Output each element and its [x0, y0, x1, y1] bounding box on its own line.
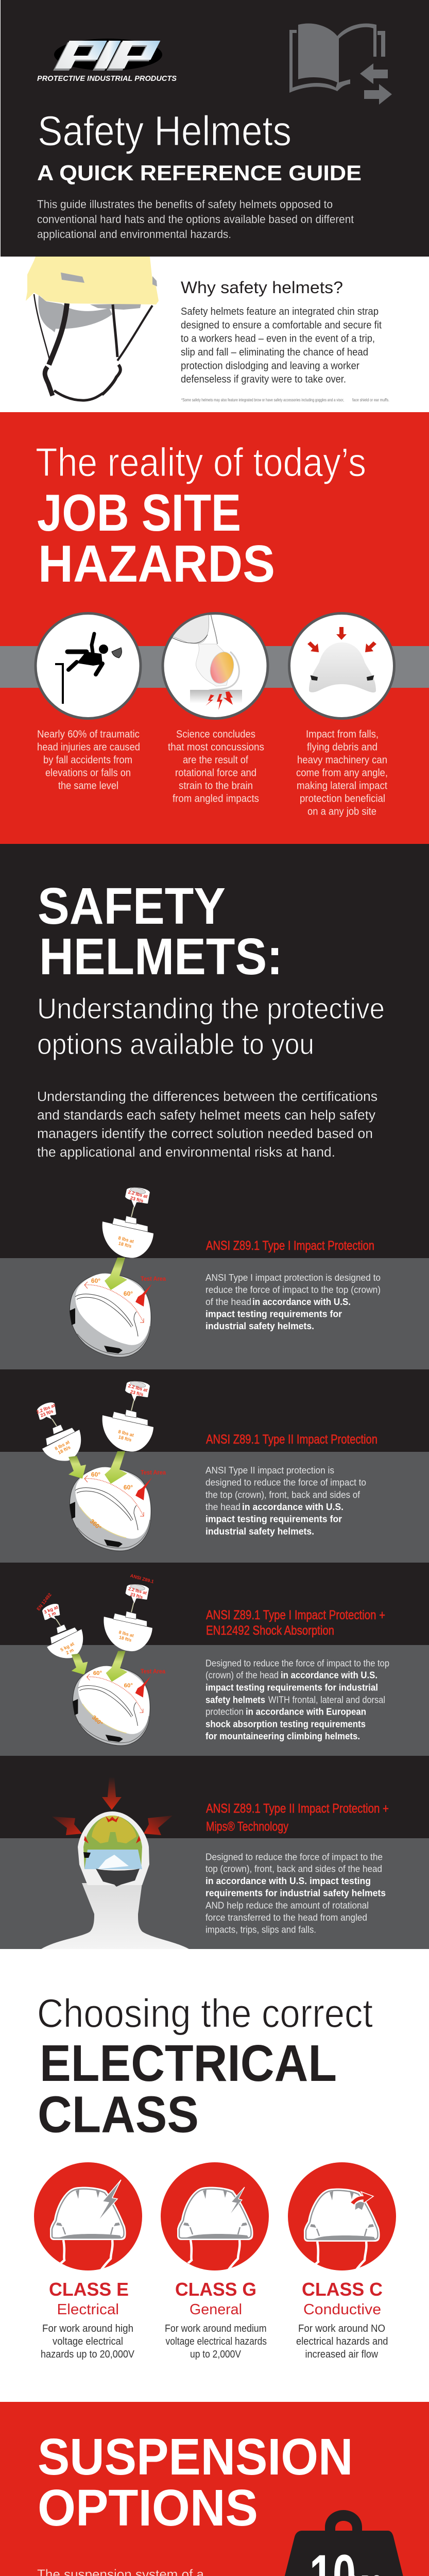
text block: intro: applicational and environmental hazards. [37, 228, 231, 241]
illustration: Type I impact test: 23 ft/s [130, 1195, 144, 1204]
text block: Type I: industrial safety helmets. [205, 1320, 314, 1331]
title: Type I + EN12492: EN12492 Shock Absorption [206, 1623, 334, 1638]
text block: Type I + EN12492: for mountaineering climbing helmets. [205, 1731, 360, 1741]
title: Type I + EN12492 [206, 1608, 385, 1638]
text block: why: protection dislodging and leaving a worker [181, 360, 359, 371]
class G label: For work around medium [165, 2323, 267, 2334]
class E label: CLASS E [49, 2279, 129, 2300]
text block: why: designed to ensure a comfortable and secure fit [181, 319, 382, 331]
illustration: EN12492 shock absorption test: 1 m [47, 1611, 57, 1618]
text block: Type I + EN12492: impact testing requirements for industrial [205, 1682, 378, 1693]
illustration: EN12492 shock absorption test: EN 12492 [36, 1592, 53, 1612]
class C label: CLASS C [302, 2279, 383, 2300]
text block: Type I: ANSI Type I impact protection is designed to [205, 1272, 381, 1283]
text block: Type II: ANSI Type II impact protection is [205, 1465, 334, 1476]
illustration: Type I impact test: 60° [91, 1277, 100, 1284]
class C label: Conductive [303, 2301, 381, 2318]
class C label [296, 2279, 388, 2360]
title: Type I: ANSI Z89.1 Type I Impact Protection [206, 1239, 374, 1253]
caption: lateral impacts: protection beneficial [300, 793, 385, 804]
text block: Type I: in accordance with U.S. [252, 1296, 351, 1307]
illustration: EN12492 shock absorption test: 2 m [65, 1647, 75, 1655]
text block: Type II: impact testing requirements for [205, 1514, 342, 1524]
icon: yellow helmet with chin strap [26, 257, 159, 400]
icon: class E helmet [34, 2162, 142, 2270]
caption: fall accidents: Nearly 60% of traumatic [37, 728, 140, 740]
class C label: electrical hazards and [296, 2336, 388, 2347]
illustration: EN12492 shock absorption test: 5 kg at [60, 1641, 75, 1652]
caption: fall accidents [37, 728, 140, 791]
icon: class G helmet [161, 2162, 269, 2270]
text block: Type II + Mips: requirements for industrial safety helmets [205, 1888, 386, 1899]
caption: concussions: that most concussions [168, 741, 264, 753]
text block: understanding: managers identify the correct solution needed based on [37, 1127, 373, 1141]
title: Safety Helmets [38, 108, 291, 155]
illustration: Type II impact test: 23 ft/s [130, 1389, 144, 1397]
illustration: Type II impact test [36, 1380, 166, 1551]
text block: Type I + EN12492: Designed to reduce the force of impact to the top [205, 1657, 389, 1668]
illustration: EN12492 shock absorption test [36, 1573, 165, 1745]
text block: Type I + EN12492: in accordance with European [246, 1706, 366, 1717]
title: Type I + EN12492: ANSI Z89.1 Type I Impact Protection + [206, 1608, 385, 1622]
panel: electrical class [34, 1998, 396, 2360]
illustration: EN12492 shock absorption test: 2.2 lbs at [128, 1586, 147, 1596]
illustration: Type I impact test [70, 1187, 166, 1357]
text block: why: to a workers head – even in the event of a trip, [181, 333, 375, 345]
text block: why: defenseless if gravity were to take over. [181, 374, 346, 385]
text block: Type I: of the head [205, 1296, 251, 1307]
text block: understanding: the applicational and environmental risks at hand. [37, 1145, 335, 1160]
heading: helmets: HELMETS: [39, 928, 283, 986]
heading: hazards: HAZARDS [38, 535, 275, 593]
caption: concussions: rotational force and [175, 767, 256, 778]
caption: fall accidents: elevations or falls on [45, 767, 131, 778]
heading: job site: JOB SITE [37, 484, 241, 542]
class E label: For work around high [42, 2323, 133, 2334]
caption: fall accidents: head injuries are caused [37, 741, 140, 753]
caption: lateral impacts [296, 728, 388, 817]
title: Type II: ANSI Z89.1 Type II Impact Protection [206, 1432, 377, 1447]
panel: job site hazards [0, 412, 429, 844]
class E label: voltage electrical [53, 2336, 123, 2347]
text block: understanding: and standards each safety helmet meets can help safety [37, 1108, 375, 1123]
icon: falling worker [36, 613, 141, 718]
arrow: top force [102, 1777, 122, 1810]
text block: Type II + Mips: Designed to reduce the force of impact to the [205, 1851, 383, 1862]
illustration: Type II impact test: 2.2 lbs at [36, 1402, 56, 1415]
illustration: EN12492 shock absorption test: 60° [93, 1670, 102, 1676]
illustration: EN12492 shock absorption test: ANSI Z89.1 [130, 1573, 155, 1584]
caption: concussions: are the result of [183, 754, 248, 766]
caption: lateral impacts: heavy machinery can [297, 754, 387, 766]
class E label [41, 2279, 135, 2360]
illustration: Type II impact test: 18 ft/s [118, 1434, 132, 1443]
subheading: Understanding the protective [37, 992, 385, 1025]
text block: why: slip and fall – eliminating the chance of head [181, 347, 368, 358]
class C label: For work around NO [298, 2323, 385, 2334]
text block: Type I: impact testing requirements for [205, 1309, 342, 1319]
icon: brain impact in head [163, 611, 268, 718]
text block: Type II + Mips [205, 1851, 386, 1935]
text block: Type II: designed to reduce the force of impact to [205, 1477, 366, 1487]
caption: lateral impacts: making lateral impact [297, 780, 387, 791]
text block: intro: conventional hard hats and the options available based on different [37, 213, 354, 226]
panel: safety helmets protective options [0, 844, 429, 1949]
text block: intro [37, 198, 354, 241]
illustration: EN12492 shock absorption test: 8 lbs at [118, 1630, 134, 1638]
title: Type II + Mips: ANSI Z89.1 Type II Impact Protection + [206, 1802, 389, 1816]
text block: why [181, 306, 382, 385]
text block: intro: This guide illustrates the benefits of safety helmets opposed to [37, 198, 333, 211]
illustration: Type I impact test: 8 lbs at [117, 1235, 134, 1244]
class C label: increased air flow [305, 2349, 379, 2360]
subtitle: A QUICK REFERENCE GUIDE [37, 161, 362, 185]
logo: PIP: PROTECTIVE INDUSTRIAL PRODUCTS [37, 74, 177, 83]
text block: Type II: in accordance with U.S. [242, 1501, 344, 1512]
text block: Type I + EN12492: shock absorption testing requirements [205, 1718, 366, 1729]
heading: class: CLASS [38, 2086, 199, 2144]
text block: Type II + Mips: impacts, trips, slips and falls. [205, 1924, 316, 1935]
panel: why safety helmets [0, 257, 429, 412]
text block: Type I: reduce the force of impact to the top (crown) [205, 1284, 381, 1295]
text block: Type II: the head [205, 1501, 241, 1512]
illustration: Type II impact test: 8 lbs at [54, 1439, 71, 1451]
heading: options: OPTIONS [38, 2479, 258, 2537]
footnote: face shield or ear muffs. [352, 397, 389, 402]
heading: suspension: SUSPENSION [38, 2428, 353, 2486]
text block: Type II: industrial safety helmets. [205, 1526, 314, 1536]
illustration: EN12492 shock absorption test: 3 kg at [43, 1604, 59, 1615]
text block: Type I + EN12492: protection [205, 1706, 244, 1717]
subheading [37, 992, 385, 1061]
illustration: EN12492 shock absorption test: 360° [91, 1715, 104, 1727]
illustration: Type I impact test: 60° [124, 1290, 133, 1297]
illustration: Type II impact test: 2.2 lbs at [128, 1383, 148, 1393]
heading: electrical: ELECTRICAL [40, 2035, 337, 2092]
arrow: right force [144, 1816, 173, 1835]
text block: Type I + EN12492: in accordance with U.S. [281, 1670, 377, 1681]
class E label: hazards up to 20,000V [41, 2349, 135, 2360]
subheading: options available to you [37, 1028, 314, 1061]
illustration: Type I impact test: 18 ft/s [118, 1241, 132, 1249]
class G label [165, 2279, 267, 2360]
illustration: Mips head cross-section [41, 1777, 189, 1949]
caption: concussions: Science concludes [176, 728, 255, 740]
text block: why: Safety helmets feature an integrated chin strap [181, 306, 379, 317]
caption: lateral impacts: come from any angle, [296, 767, 388, 778]
text block: Type I + EN12492: (crown) of the head [205, 1670, 279, 1681]
illustration: EN12492 shock absorption test: 60° [124, 1683, 133, 1689]
caption: concussions [168, 728, 264, 804]
class G label: General [190, 2301, 242, 2318]
text block: Type I + EN12492: safety helmets [205, 1694, 265, 1705]
class G label: CLASS G [175, 2279, 256, 2300]
arrow: left force [52, 1817, 82, 1835]
caption: lateral impacts: Impact from falls, [306, 728, 379, 740]
text block: Type II [205, 1465, 366, 1536]
illustration: Type II impact test: Test Area [141, 1469, 166, 1476]
illustration: Type II impact test: 60° [91, 1471, 100, 1478]
illustration: Type I impact test: Test Area [141, 1275, 166, 1282]
illustration: Type II impact test: 18 ft/s [57, 1445, 71, 1455]
caption: concussions: strain to the brain [179, 780, 253, 791]
text block: Type II + Mips: force transferred to the head from angled [205, 1912, 367, 1923]
logo: PIP [37, 39, 177, 83]
text block: Type II + Mips: in accordance with U.S. impact testing [205, 1875, 371, 1886]
text block: Type I [205, 1272, 381, 1331]
illustration: Type II impact test: 8 lbs at [117, 1429, 134, 1438]
icon: helmet under impact [289, 613, 394, 718]
icon: helmet manual book with arrows [289, 23, 392, 105]
caption: fall accidents: the same level [58, 780, 118, 791]
caption: concussions: from angled impacts [173, 793, 259, 804]
text block: Type I + EN12492 [205, 1657, 389, 1741]
text block: understanding [37, 1090, 377, 1160]
footnote: *Some safety helmets may also feature integrated brow or have safety accessories including goggles and a visor, [181, 397, 344, 402]
panel: header [0, 0, 429, 257]
heading: Why safety helmets? [181, 278, 343, 297]
text block: Type II + Mips: AND help reduce the amount of rotational [205, 1900, 369, 1910]
heading: the reality of today's: The reality of today’s [36, 439, 366, 485]
illustration: Type II impact test: 360° [89, 1518, 103, 1532]
class E label: Electrical [57, 2301, 119, 2318]
caption: lateral impacts: flying debris and [307, 741, 377, 753]
title: Type II + Mips: Mips® Technology [206, 1820, 288, 1834]
class G label: voltage electrical hazards [166, 2336, 267, 2347]
illustration: Type II impact test: 60° [124, 1484, 133, 1491]
illustration: Type II impact test: 23 ft/s [40, 1409, 54, 1418]
icon: class C helmet [288, 2162, 396, 2271]
panel: suspension options [0, 2402, 429, 2576]
illustration: EN12492 shock absorption test: Test Area [141, 1668, 165, 1675]
illustration: EN12492 shock absorption test: 23 ft/s [130, 1591, 144, 1600]
text block: understanding: Understanding the differences between the certifications [37, 1090, 377, 1104]
illustration: Type I impact test: 2.2 lbs at [128, 1190, 148, 1199]
caption: fall accidents: by fall accidents from [43, 754, 132, 766]
icon: ten pound weight [275, 2510, 413, 2576]
caption: lateral impacts: on a any job site [307, 806, 376, 817]
text block: Type II + Mips: top (crown), front, back and sides of the head [205, 1863, 382, 1874]
class G label: up to 2,000V [190, 2349, 242, 2360]
title: Type II + Mips [206, 1802, 389, 1834]
illustration: EN12492 shock absorption test: 18 ft/s [118, 1635, 132, 1643]
heading: safety: SAFETY [38, 877, 226, 935]
text block: Type I + EN12492: WITH frontal, lateral and dorsal [268, 1694, 385, 1705]
text block: Type II: the top (crown), front, back and sides of [205, 1489, 361, 1500]
heading: choosing the correct: Choosing the correct [37, 1991, 373, 2036]
